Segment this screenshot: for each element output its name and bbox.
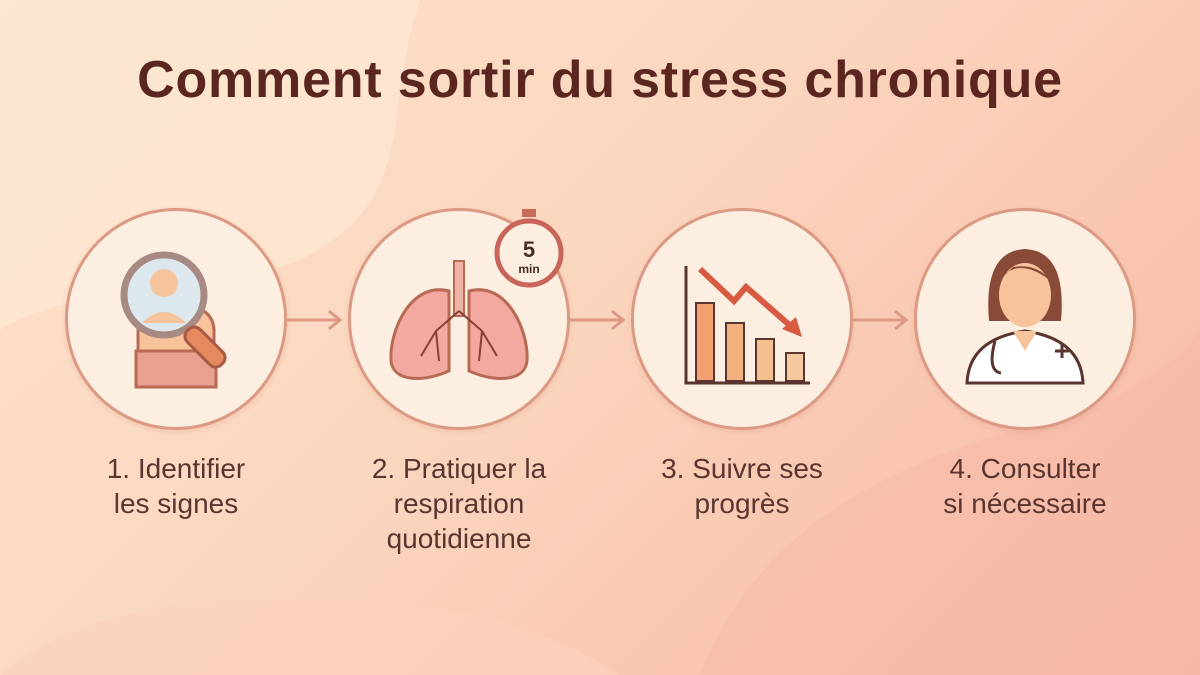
icon: stopwatch 5 min: min [518, 262, 540, 276]
label 3: progrès [695, 488, 789, 519]
arrow 2 [570, 310, 626, 330]
arrow 3 [853, 310, 908, 330]
label 1 [107, 453, 245, 519]
label 2: quotidienne [387, 523, 531, 554]
label 3 [661, 453, 823, 519]
step 2 circle: lungs [348, 208, 570, 430]
label 1: 1. Identifier [107, 453, 245, 484]
icon: stopwatch 5 min: 5 [523, 237, 535, 262]
step 1 circle: magnifier over body [65, 208, 287, 430]
arrow 1 [287, 310, 342, 330]
label 4: si nécessaire [943, 488, 1107, 519]
label 1: les signes [114, 488, 238, 519]
step 4 circle: doctor [914, 208, 1136, 430]
label 2: 2. Pratiquer la [372, 453, 546, 484]
label 3: 3. Suivre ses [661, 453, 823, 484]
label 2 [372, 453, 546, 554]
step 3 circle: bar chart [631, 208, 853, 430]
label 2: respiration [394, 488, 524, 519]
title: Comment sortir du stress chronique [137, 51, 1063, 109]
label 4: 4. Consulter [950, 453, 1100, 484]
icon: stopwatch 5 min [494, 209, 564, 288]
label 4 [943, 453, 1107, 519]
